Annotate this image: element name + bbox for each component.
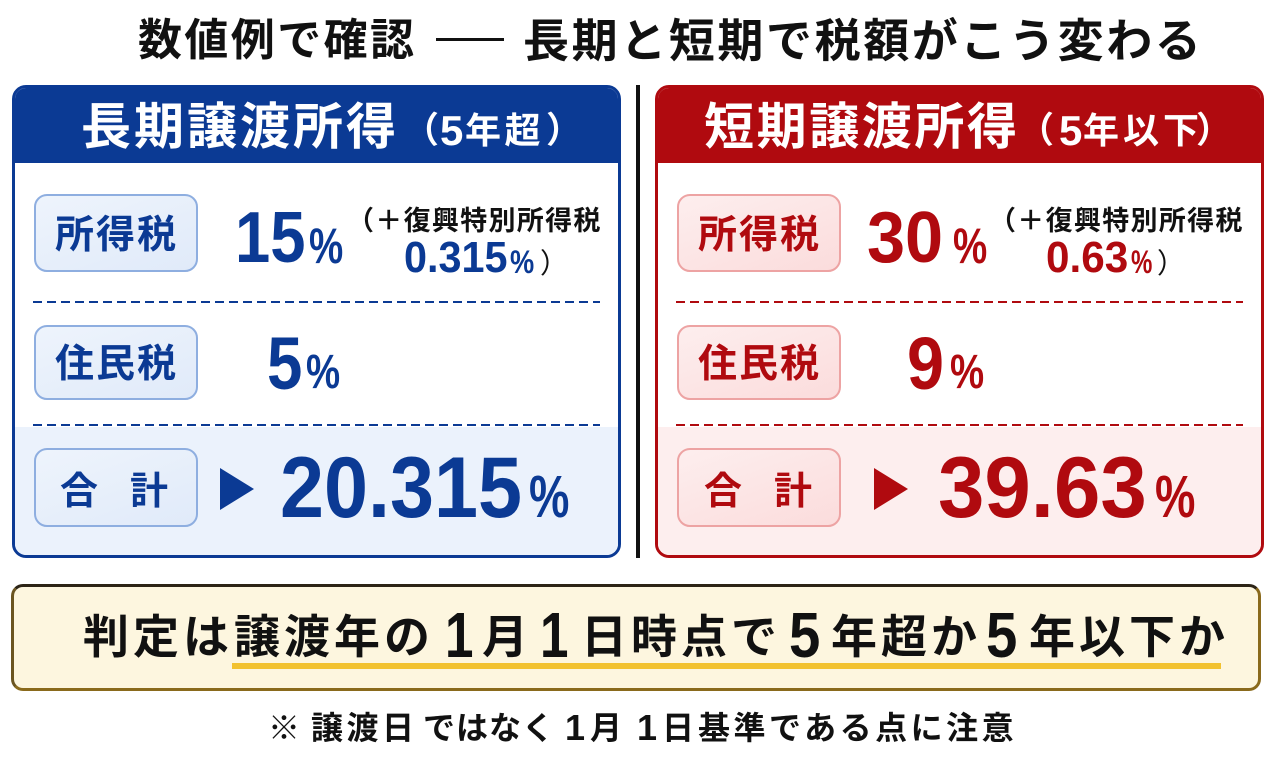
- total row background: [15, 427, 618, 558]
- total row background: [658, 427, 1261, 558]
- rate: resident tax 9%: 9: [907, 322, 944, 405]
- panel: short-term capital gains: [655, 85, 1264, 558]
- callout text: 年以下か: [1029, 611, 1229, 663]
- percent sign: %: [950, 346, 984, 399]
- percent sign: %: [953, 218, 987, 274]
- footnote: ではなく: [423, 710, 555, 746]
- percent sign: %: [1155, 464, 1195, 530]
- note: reconstruction tax: ）: [1157, 248, 1185, 279]
- note: reconstruction tax: [347, 206, 602, 282]
- arrow: [220, 468, 254, 510]
- note: reconstruction tax: %: [510, 244, 534, 280]
- note: reconstruction tax: %: [1131, 244, 1152, 280]
- callout text: 5: [986, 599, 1017, 671]
- panel heading: short-term: ）: [1196, 109, 1232, 150]
- label: income tax: 所得税: [55, 214, 178, 257]
- note: reconstruction tax: [989, 206, 1244, 282]
- label: total: 合計: [60, 471, 200, 513]
- panel heading: long-term: （: [403, 109, 439, 150]
- callout text: 判定は: [83, 611, 233, 663]
- label: total: [34, 448, 198, 527]
- footnote: 日: [662, 710, 694, 746]
- callout text: 5: [789, 599, 820, 671]
- total: 20.315%: 20.315: [280, 440, 522, 536]
- callout text: 1: [540, 599, 568, 671]
- callout text: 年超か: [831, 611, 981, 663]
- divider: [33, 300, 600, 303]
- footnote: ※: [268, 710, 300, 746]
- note: reconstruction tax: （＋復興特別所得税: [347, 206, 602, 236]
- panel heading: long-term: 5: [440, 106, 463, 154]
- label: total: [677, 448, 841, 527]
- label: income tax: [34, 194, 198, 272]
- title: 数値例で確認: [138, 16, 416, 65]
- total: 39.63%: 39.63: [938, 440, 1147, 536]
- footnote: 譲渡日: [311, 710, 418, 746]
- panel heading: long-term: 長期譲渡所得: [81, 99, 399, 155]
- panel heading: short-term: 5: [1059, 106, 1082, 154]
- rate: resident tax 5%: 5: [267, 322, 302, 405]
- label: income tax: [677, 194, 841, 272]
- label: income tax: 所得税: [698, 214, 821, 257]
- title: 長期と短期で税額がこう変わる: [523, 14, 1203, 66]
- center divider: [636, 85, 640, 558]
- panel heading: short-term: （: [1018, 109, 1054, 150]
- percent sign: %: [306, 346, 340, 399]
- highlight underline: [232, 663, 1221, 668]
- callout text: 譲渡年の: [234, 611, 434, 663]
- panel heading: long-term: 年超: [465, 110, 544, 151]
- divider: [676, 424, 1243, 426]
- footnote: 月: [590, 710, 622, 746]
- arrow: [874, 468, 908, 510]
- panel heading: short-term: [655, 85, 1264, 163]
- label: resident tax: 住民税: [55, 343, 178, 386]
- note: reconstruction tax: 0.315: [404, 233, 508, 282]
- callout text: 月: [482, 611, 528, 663]
- divider: [33, 424, 600, 426]
- callout text: [83, 599, 1229, 671]
- note: reconstruction tax: （＋復興特別所得税: [989, 206, 1244, 236]
- note: reconstruction tax: 0.63: [1046, 233, 1128, 282]
- label: resident tax: 住民税: [698, 343, 821, 386]
- panel heading: short-term: 短期譲渡所得: [704, 99, 1020, 155]
- label: resident tax: [677, 325, 841, 400]
- percent sign: %: [309, 218, 343, 274]
- callout: judgement rule: [11, 584, 1261, 691]
- panel heading: long-term: ）: [546, 109, 582, 150]
- title: [138, 14, 1203, 66]
- panel heading: short-term: 年以下: [1083, 110, 1203, 151]
- note: reconstruction tax: ）: [540, 248, 568, 279]
- label: resident tax: [34, 325, 198, 400]
- label: total: 合計: [704, 471, 844, 513]
- footnote: [268, 706, 1017, 748]
- panel heading: long-term: [12, 85, 621, 163]
- footnote: 基準である点に注意: [698, 710, 1017, 746]
- rate: income tax 15%: 15: [235, 198, 305, 278]
- footnote: 1: [565, 706, 585, 748]
- callout text: 日時点で: [581, 611, 781, 663]
- footnote: 1: [637, 706, 657, 748]
- panel: long-term capital gains: [12, 85, 621, 558]
- callout text: 1: [445, 599, 473, 671]
- divider: [676, 300, 1243, 303]
- rate: income tax 30%: 30: [867, 198, 943, 278]
- percent sign: %: [529, 464, 569, 530]
